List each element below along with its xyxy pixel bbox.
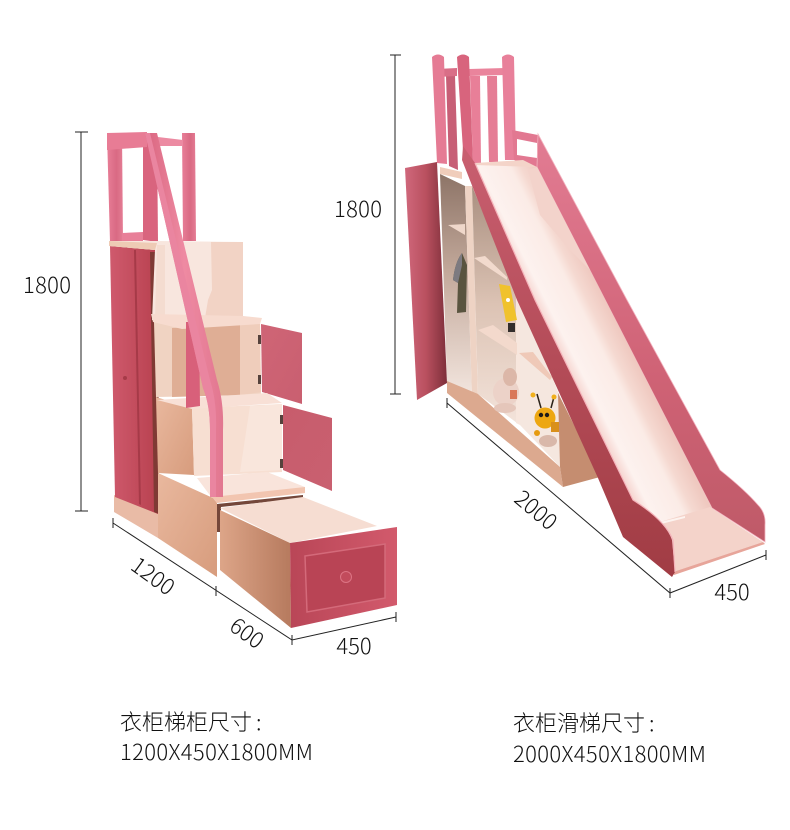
back cabinet door (405, 162, 447, 400)
second step interior (151, 314, 262, 397)
right floor dimensions (447, 398, 766, 607)
slide right rail (537, 134, 765, 542)
toy: yellow sponge (499, 284, 517, 332)
toy: bee (530, 392, 559, 447)
lower block (158, 473, 305, 577)
wardrobe door (110, 246, 159, 514)
slide rail inner highlight (475, 163, 675, 572)
left floor dimensions (113, 518, 396, 661)
caption: slide size: 衣柜滑梯尺寸: (513, 706, 655, 738)
right unit: wardrobe slide (405, 54, 765, 577)
slide top rail window (512, 130, 542, 170)
caption: stair cabinet size (120, 705, 313, 767)
left floor dimensions: 1200 (125, 548, 182, 602)
wardrobe base (114, 495, 158, 538)
caption: slide size (513, 706, 706, 769)
cabinet shelves (448, 224, 552, 380)
third door (280, 405, 332, 491)
slide surface (475, 165, 765, 575)
caption: stair cabinet size: 1200X450X1800MM (120, 735, 313, 767)
left height dimension (23, 132, 88, 511)
pull-out drawer (220, 497, 397, 628)
slide left rail (462, 146, 675, 577)
toy: plush cow (493, 368, 519, 413)
left unit: wardrobe stair cabinet (107, 132, 397, 628)
right floor dimensions: 450 (714, 575, 750, 607)
right floor dimensions: 2000 (508, 482, 565, 537)
left height dimension: 1800 (23, 268, 71, 300)
slat frame (432, 54, 516, 170)
shelf cabinet (440, 167, 600, 487)
third step (156, 393, 305, 498)
ladder frame (107, 132, 196, 322)
right height dimension: 1800 (334, 192, 382, 224)
top step box (109, 241, 243, 320)
caption: stair cabinet size: 衣柜梯柜尺寸: (120, 705, 262, 737)
toy: hanging jacket (453, 253, 467, 313)
right height dimension (334, 55, 401, 394)
left floor dimensions: 600 (224, 609, 271, 656)
handrail (145, 133, 223, 497)
caption: slide size: 2000X450X1800MM (513, 737, 706, 769)
second door (258, 324, 302, 404)
slide top platform (475, 160, 537, 172)
left floor dimensions: 450 (336, 629, 372, 661)
